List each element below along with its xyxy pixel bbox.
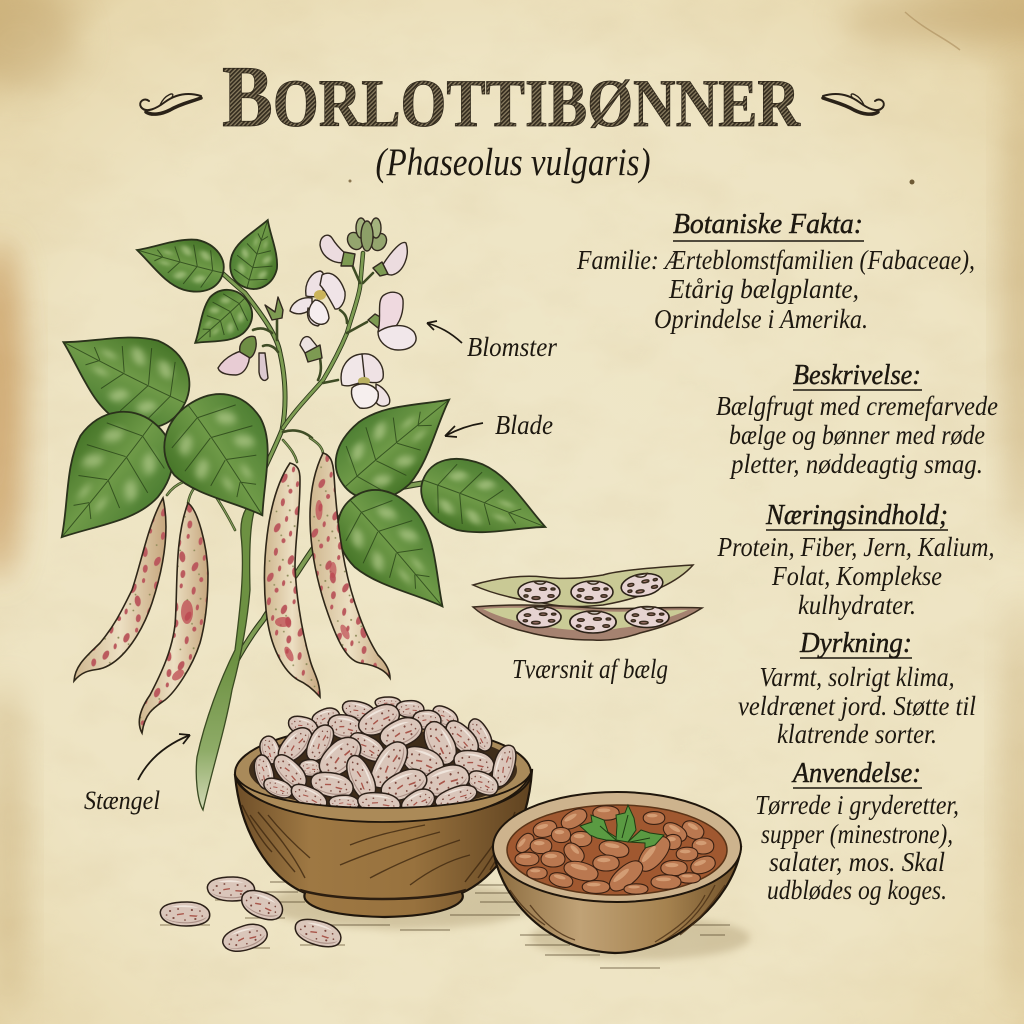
label: Blomster with arrow (427, 321, 557, 362)
stew beans (513, 805, 718, 896)
bowl body (235, 770, 532, 917)
text block: Beskrivelse: bælge og bønner med røde (729, 420, 985, 450)
text block: Anvendelse: supper (minestrone), (761, 819, 953, 849)
label: Blade with arrow (445, 410, 553, 440)
label: Tværsnit af bælg: Tværsnit af bælg (512, 654, 668, 684)
text block: Anvendelse: udblødes og koges. (767, 875, 947, 905)
text block: Næringsindhold: Protein, Fiber, Jern, Kalium, (717, 532, 994, 562)
bowl front rim (235, 770, 532, 822)
label: Blade with arrow: Blade (495, 410, 553, 440)
ornament: left flourish (140, 94, 201, 114)
subtitle: latin name: (Phaseolus vulgaris) (376, 141, 650, 184)
title: BORLOTTIBØNNER (222, 49, 801, 146)
plant stems (153, 253, 425, 663)
small bowl rim (493, 792, 741, 902)
text block: Beskrivelse (716, 360, 998, 479)
text block: Beskrivelse: Beskrivelse: (793, 360, 921, 391)
label: Blomster with arrow: Blomster (467, 332, 557, 362)
pod cross-section (473, 565, 702, 640)
main stalk (196, 503, 256, 810)
text block: Botaniske Fakta: Oprindelse i Amerika. (654, 304, 868, 334)
text block: Beskrivelse: Bælgfrugt med cremefarvede (716, 391, 998, 421)
text block: Anvendelse: salater, mos. Skal (769, 847, 945, 877)
pods (74, 453, 390, 733)
pod 3 (265, 463, 320, 697)
text block: Beskrivelse: pletter, nøddeagtig smag. (729, 449, 983, 479)
small bowl of cooked beans (493, 792, 750, 968)
loose beans on table (160, 877, 345, 956)
text block: Dyrkning: klatrende sorter. (777, 719, 937, 749)
bowl shadow (262, 881, 535, 930)
pod 4 (310, 453, 390, 678)
text block: Næringsindhold (717, 500, 994, 620)
text block: Dyrkning: Dyrkning: (799, 628, 912, 659)
ornament: right flourish (823, 94, 884, 114)
text block: Anvendelse: Anvendelse: (791, 758, 921, 789)
flower B (368, 292, 416, 350)
text block: Botaniske Fakta (576, 209, 975, 334)
label: Stængel with arrow: Stængel (84, 786, 160, 815)
large wooden bowl of dried beans (235, 697, 535, 930)
flower A (290, 271, 345, 326)
small buds (218, 297, 322, 380)
leaf group (24, 213, 558, 633)
text block: Dyrkning: veldrænet jord. Støtte til (738, 691, 976, 721)
text block: Næringsindhold: Næringsindhold; (765, 500, 948, 531)
flower buds at top (320, 218, 407, 276)
label: Stængel with arrow (84, 734, 190, 815)
small bowl body (493, 847, 741, 953)
text block: Næringsindhold: Folat, Komplekse (771, 561, 942, 591)
flower C (341, 354, 390, 408)
text block: Dyrkning: Varmt, solrigt klima, (760, 662, 954, 692)
small bowl shadow (520, 916, 750, 968)
bean plant illustration (24, 213, 558, 810)
pod 2 (139, 503, 208, 733)
text block: Næringsindhold: kulhydrater. (798, 590, 916, 620)
text block: Botaniske Fakta: Botaniske Fakta: (673, 209, 863, 240)
text block: Botaniske Fakta: Etårig bælgplante, (668, 274, 859, 304)
bowl rim and interior (235, 725, 531, 821)
text block: Anvendelse: Tørrede i gryderetter, (755, 790, 959, 820)
text block: Anvendelse (755, 758, 959, 905)
flowers (218, 218, 416, 408)
parsley garnish (580, 805, 664, 848)
heap of beans (251, 697, 519, 820)
text block: Dyrkning (738, 628, 976, 749)
text block: Botaniske Fakta: Familie: Ærteblomstfamilien (Fabaceae), (576, 245, 975, 275)
pod 1 (74, 498, 166, 681)
